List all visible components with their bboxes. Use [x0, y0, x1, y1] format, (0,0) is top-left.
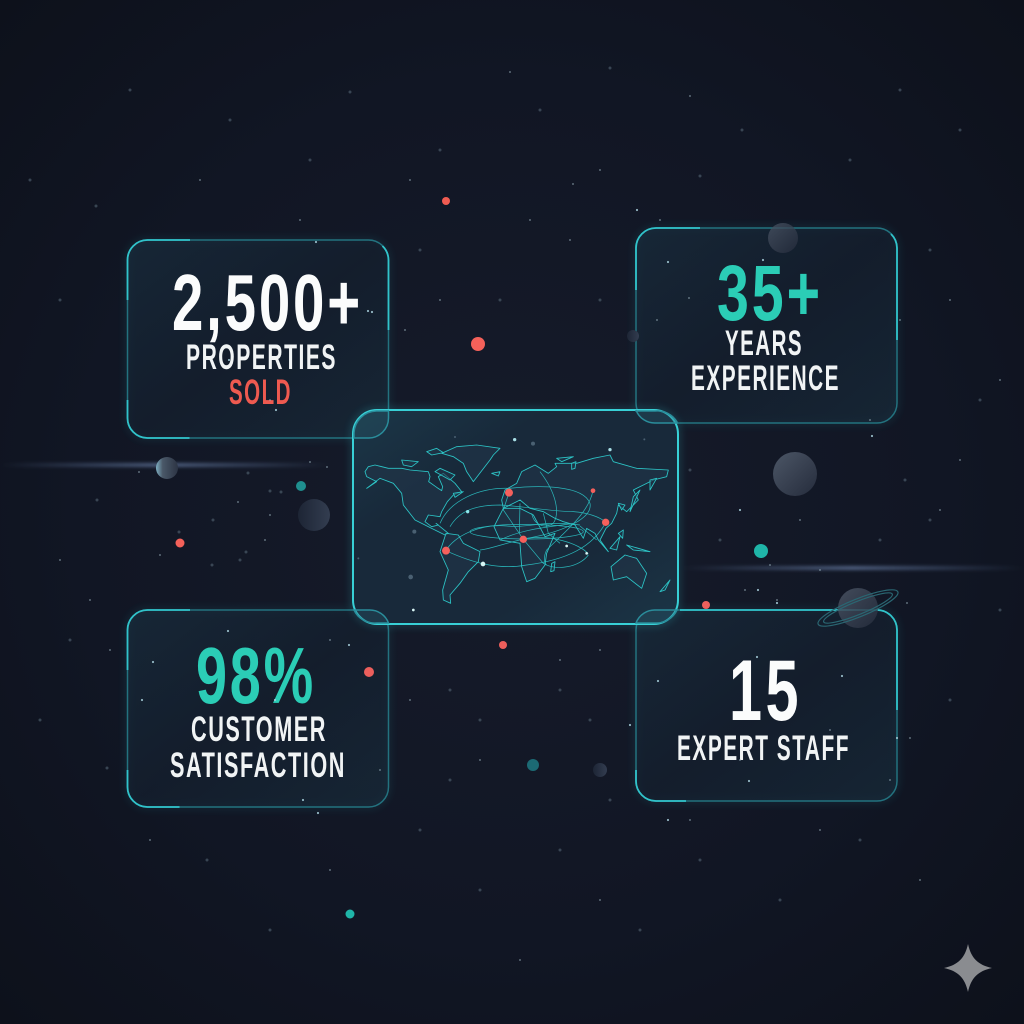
panel: properties sold	[128, 240, 388, 438]
world map outline	[357, 436, 670, 611]
label: properties: PROPERTIES	[186, 338, 337, 377]
label: satisfaction: SATISFACTION	[170, 746, 346, 785]
panel: years experience	[636, 228, 897, 423]
panel: world map	[353, 410, 678, 624]
islands	[402, 448, 670, 592]
flight arcs	[440, 472, 606, 567]
eurasia	[502, 455, 668, 552]
australia	[611, 555, 647, 588]
label: expert staff: EXPERT STAFF	[677, 729, 850, 768]
floating coral and teal dots	[176, 197, 768, 918]
icon: sparkle	[944, 944, 992, 992]
planets	[156, 223, 817, 777]
ringed planet	[815, 584, 901, 632]
card corner overlaps	[354, 410, 677, 623]
madagascar	[551, 562, 555, 572]
label: sold: SOLD	[229, 373, 292, 412]
label: customer: CUSTOMER	[191, 710, 327, 749]
stat: 35+: 35+	[717, 248, 823, 337]
map nodes: light	[412, 438, 612, 611]
stat: 98%: 98%	[196, 631, 316, 720]
greenland	[442, 445, 500, 482]
map background specks	[357, 436, 645, 579]
south america	[440, 533, 480, 603]
panel: customer satisfaction	[128, 610, 388, 807]
north america	[365, 465, 462, 535]
map nodes: coral	[442, 488, 609, 555]
label: years: YEARS	[725, 324, 803, 363]
stat: 15: 15	[729, 643, 802, 739]
panel: expert staff	[636, 610, 897, 801]
horizontal light streaks	[0, 463, 1024, 570]
africa	[494, 508, 555, 582]
label: experience: EXPERIENCE	[691, 359, 840, 398]
stat: 2,500+: 2,500+	[172, 258, 363, 347]
